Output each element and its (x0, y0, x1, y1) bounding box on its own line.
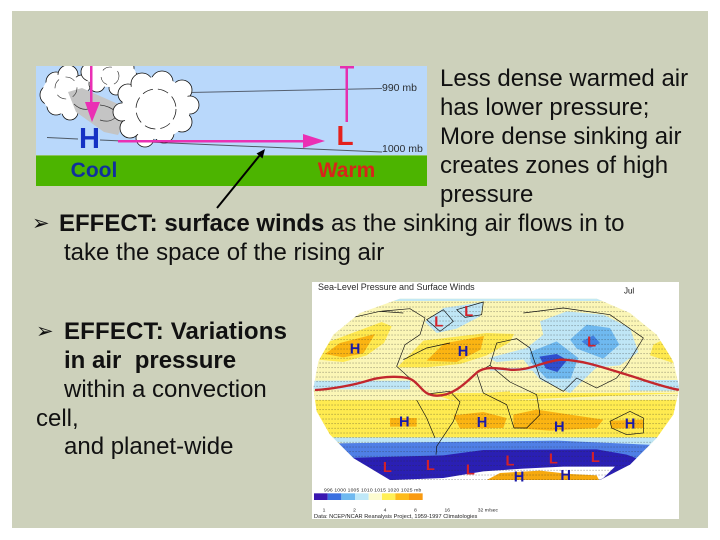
southern ocean dark low (353, 449, 636, 480)
high pressure markers: H (625, 416, 635, 432)
ground strip (36, 156, 427, 186)
month label: Jul (624, 286, 634, 295)
southern highs orange (390, 410, 643, 431)
high pressure markers: H (399, 415, 410, 431)
low pressure markers: L (506, 453, 515, 469)
low pressure markers: L (587, 334, 596, 350)
Warm label: Warm (318, 159, 375, 182)
southern medium band (338, 440, 650, 465)
low pressure blues: dark (539, 354, 567, 372)
text block: density and pressure (440, 65, 688, 208)
text block: density and pressure: creates zones of high (440, 152, 668, 179)
equatorial trough line (315, 360, 680, 396)
high pressure markers: H (554, 420, 565, 436)
map image background (312, 282, 679, 519)
990 mb label: 990 mb (382, 82, 417, 94)
bullet: air pressure variations: and planet-wide (64, 433, 233, 460)
low pressure blues: medium (530, 325, 619, 379)
grey cloud shadow (68, 88, 127, 135)
northern highs: orange (325, 334, 484, 362)
high pressure markers (350, 341, 635, 485)
arctic strip (394, 298, 602, 301)
L label: L (336, 120, 354, 151)
high pressure markers: H (350, 341, 360, 357)
coastlines (353, 302, 643, 455)
cloud group (40, 56, 199, 147)
Antarctica (394, 466, 615, 480)
rising line at L (340, 66, 354, 122)
low pressure markers: L (466, 463, 475, 479)
text block: density and pressure: has lower pressure; (440, 94, 649, 121)
surface wind arrow (118, 134, 325, 148)
high pressure markers: H (514, 469, 524, 485)
text block: density and pressure: More dense sinking air (440, 123, 681, 150)
wind vector dots (310, 298, 685, 481)
high pressure markers: H (560, 468, 571, 484)
bullet: air pressure variations: cell, (36, 405, 79, 432)
low pressure markers: L (591, 450, 600, 466)
1000 mb isobar (47, 138, 382, 152)
text block: density and pressure: Less dense warmed air (440, 65, 688, 92)
pressure colour legend (314, 487, 423, 500)
low pressure markers: L (549, 451, 558, 467)
low pressure markers: L (464, 304, 473, 320)
990 mb isobar (190, 88, 382, 92)
bullet: surface winds effect: ➢ (32, 211, 50, 235)
base pale yellow (310, 295, 685, 485)
descending arrow at H (85, 66, 100, 122)
data source: Data: NCEP/NCAR Reanalysis Project, 1959-1997 Climatologies (314, 514, 478, 520)
southern pale band (332, 437, 657, 447)
world map: sea-level pressure and surface winds (312, 282, 680, 519)
low pressure markers: L (426, 458, 435, 474)
1000 mb label: 1000 mb (382, 143, 423, 155)
bullet: air pressure variations (36, 318, 287, 460)
high pressure markers: H (458, 344, 468, 360)
southern subtropics yellow (310, 393, 685, 438)
wind speed legend: 1 2 4 8 16 32 m/sec (323, 507, 499, 513)
map body (310, 295, 685, 485)
H label: H (79, 123, 100, 155)
bullet: air pressure variations: within a convection (64, 376, 267, 403)
sky (36, 66, 427, 155)
bullet: surface winds effect (32, 210, 625, 266)
bullet: surface winds effect: EFFECT: surface winds as the sinking air flows in to (59, 210, 625, 237)
low pressure markers: L (383, 460, 392, 476)
diagram: surface pressure between cool and warm ground (36, 66, 427, 209)
high pressure markers: H (477, 415, 487, 431)
northern highs: yellow (319, 322, 674, 392)
black pointer arrow (217, 149, 265, 208)
bullet: surface winds effect: take the space of the rising air (64, 239, 384, 266)
low pressure markers (383, 304, 600, 479)
bullet: air pressure variations: in air pressure (64, 347, 236, 374)
low pressure markers: L (434, 315, 443, 331)
pressure colour legend: 996 1000 1005 1010 1015 1020 1025 mb (324, 487, 422, 493)
low pressure blues: pale (310, 302, 685, 393)
map title: Sea-Level Pressure and Surface Winds (318, 282, 475, 292)
Cool label: Cool (71, 159, 117, 182)
bullet: air pressure variations: EFFECT: Variations (64, 318, 287, 345)
text block: density and pressure: pressure (440, 181, 533, 208)
bullet: air pressure variations: ➢ (36, 319, 54, 343)
